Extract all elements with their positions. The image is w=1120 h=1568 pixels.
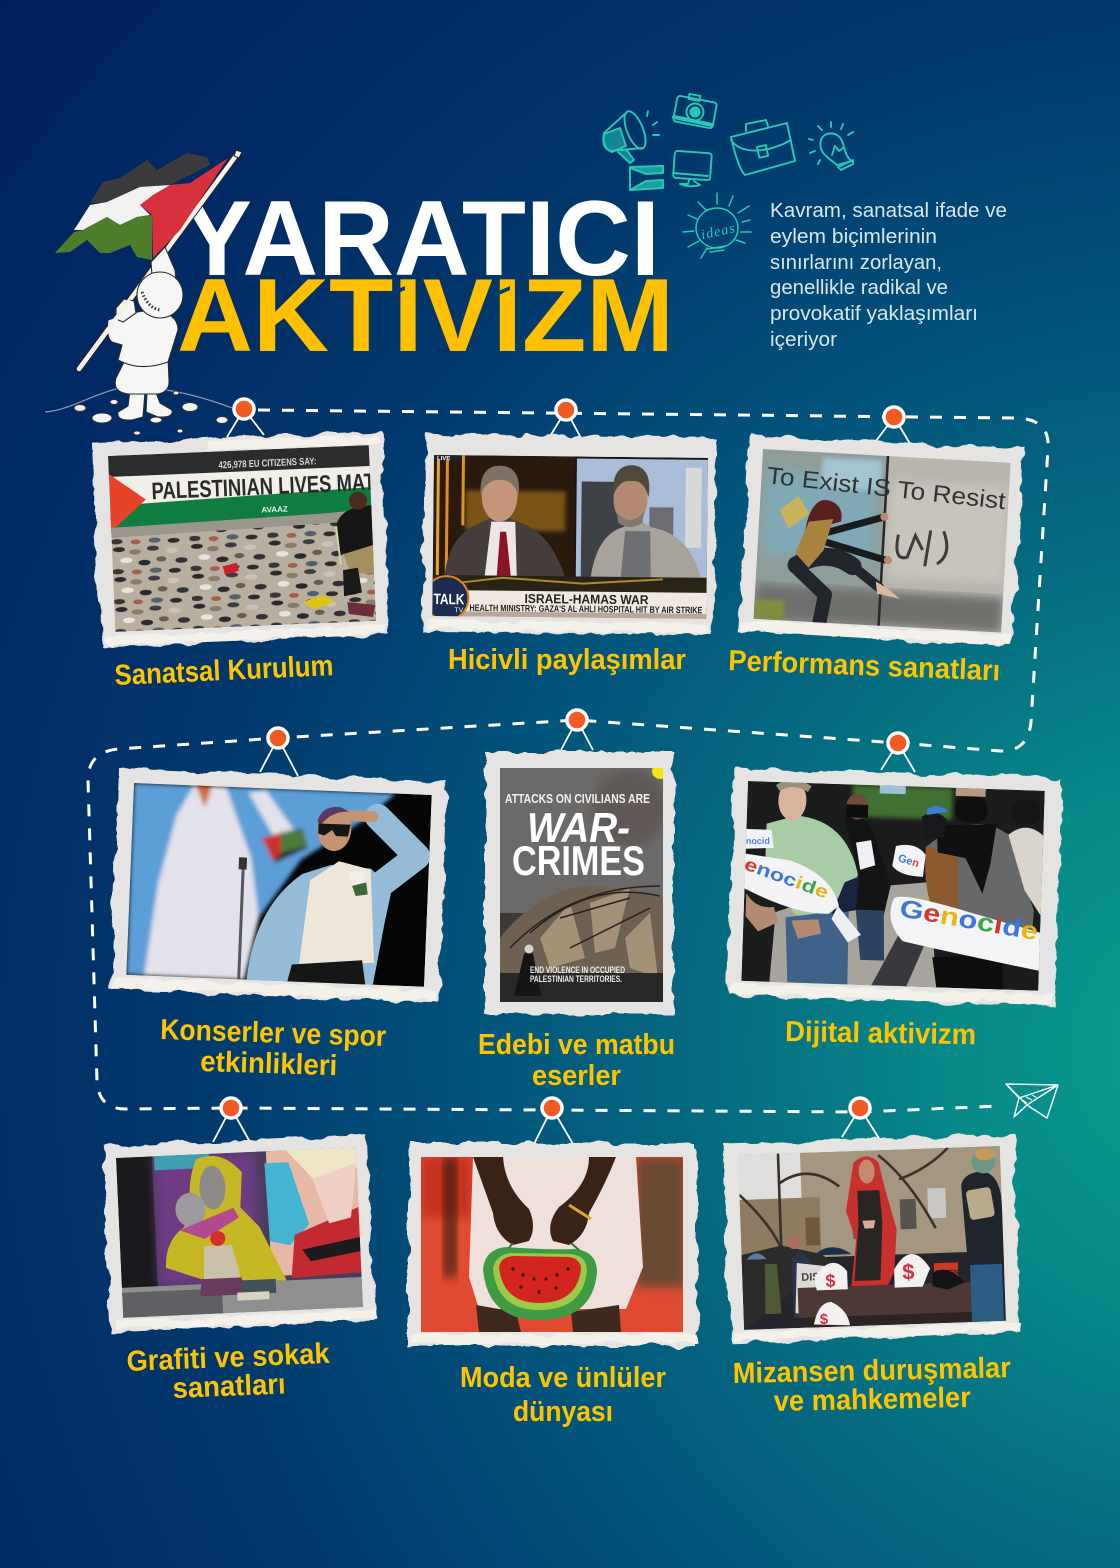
icon: ideas bulb [683,193,751,258]
caption: Grafiti ve sokak sanatları [126,1338,331,1405]
photo card 5: war crimes poster: CRIMES [512,837,645,884]
photo card 1: shoe installation: PALESTINIAN LIVES MATT [151,468,387,505]
intro paragraph: sınırlarını zorlayan, [770,252,942,274]
photo card 5: war crimes poster: WAR- [527,804,630,851]
caption: Edebi ve matbu eserler [478,1029,675,1092]
pin 2 [556,400,576,420]
dashed route line [88,410,1048,1112]
photo card 2: TV interview [423,434,715,635]
icon: briefcase [731,120,795,175]
pin 4 [268,728,288,748]
intro paragraph: provokatif yaklaşımları [770,303,978,325]
title: YARATICI: YARATICI [182,178,660,298]
photo card 7: graffiti mural [102,1135,376,1332]
caption: Grafiti ve sokak sanatları: sanatları [172,1368,286,1405]
photo card 6: digital activism protest: enocide [742,854,831,903]
pin 3 [884,407,904,427]
photo card 2: TV interview: TALK [433,591,465,608]
icon: hatched play block [630,166,663,190]
photo card 2: TV interview: HEALTH MINISTRY: GAZA'S AL AHLI HOSPITAL HIT BY AIR STRIKE [469,603,702,615]
caption: Moda ve ünlüler dünyası [460,1362,666,1428]
photo card 9: mock trial protest: $ [820,1311,829,1328]
pin 9 [850,1098,870,1118]
pin 6 [888,733,908,753]
illustration: child raising the Palestinian flag [45,150,242,435]
photo card 3: wall performance: To Exist IS To Resist [765,462,1007,515]
photo card 2: TV interview: TV [454,607,464,614]
photo card 5: war crimes poster: END VIOLENCE IN OCCUPIED [530,965,625,975]
caption: Dijital aktivizm: Dijital aktivizm [785,1016,976,1051]
caption: Edebi ve matbu eserler: eserler [532,1060,621,1092]
intro paragraph [770,200,1007,351]
photo card 9: mock trial protest: APAR [800,1290,825,1301]
caption: Konserler ve spor etkinlikleri [160,1014,387,1082]
title: AKTİVİZM: AKTİVİZM [177,258,674,374]
intro paragraph: genellikle radikal ve [770,277,948,299]
icons: teal doodles [603,94,853,258]
photo card 5: war crimes poster [485,752,674,1014]
photo card 6: digital activism protest: Gen [897,852,921,870]
pin 7 [221,1098,241,1118]
photo card 1: shoe installation: AVAAZ [261,505,288,515]
photo card 5: war crimes poster: ATTACKS ON CIVILIANS ARE [505,791,650,806]
photo card 2: TV interview: LIVE [437,456,450,462]
photo card 3: wall performance [739,434,1023,646]
icon: megaphone [603,108,659,163]
icon: light bulb [809,122,853,170]
caption: Konserler ve spor etkinlikleri: etkinlikleri [200,1046,338,1082]
photo card 9: mock trial protest [723,1134,1020,1343]
icon: paper plane [1006,1084,1058,1118]
icon: computer monitor [673,151,712,186]
photo card 6: digital activism protest [727,768,1062,1006]
photo card 1: shoe installation [91,431,393,648]
caption: Sanatsal Kurulum: Sanatsal Kurulum [114,650,334,692]
caption: Hicivli paylaşımlar: Hicivli paylaşımlar [448,644,686,676]
pin 8 [542,1098,562,1118]
photo card 8: watermelon bag [408,1143,697,1346]
caption: Konserler ve spor etkinlikleri: Konserler ve spor [160,1014,387,1053]
pin legs [213,409,915,1144]
pin 5 [567,710,587,730]
caption: Moda ve ünlüler dünyası: dünyası [513,1396,613,1428]
photo card 9: mock trial protest: $ [825,1271,836,1291]
photo card 9: mock trial protest: DEFEND [935,1269,964,1277]
photo card 6: digital activism protest: nocid [746,836,770,846]
photo card 4: concert performer [110,768,447,1002]
title: AKTİVİZM [180,279,667,351]
caption: Mizansen duruşmalar ve mahkemeler [732,1352,1011,1418]
photo card 6: digital activism protest: Genocide [898,894,1040,946]
photo card 2: TV interview: ISRAEL-HAMAS WAR [524,591,649,607]
caption: Performans sanatları: Performans sanatları [728,645,1001,687]
caption: Moda ve ünlüler dünyası: Moda ve ünlüler [460,1362,666,1394]
caption: Edebi ve matbu eserler: Edebi ve matbu [478,1029,675,1061]
pin 1 [234,399,254,419]
photo card 5: war crimes poster: PALESTINIAN TERRITORIES. [530,974,622,984]
caption: Mizansen duruşmalar ve mahkemeler: ve mahkemeler [773,1382,971,1418]
caption: Mizansen duruşmalar ve mahkemeler: Mizansen duruşmalar [732,1352,1011,1390]
icon: camera [673,94,717,129]
intro paragraph: eylem biçimlerinin [770,226,937,248]
icon: ideas bulb: ideas [700,221,737,243]
photo card 1: shoe installation: 426,978 EU CITIZENS SAY: [218,456,317,471]
intro paragraph: Kavram, sanatsal ifade ve [770,200,1007,222]
caption: Grafiti ve sokak sanatları: Grafiti ve sokak [126,1338,331,1378]
photo card 9: mock trial protest: DISA [801,1271,828,1284]
intro paragraph: içeriyor [770,329,837,351]
photo card 9: mock trial protest: $ [902,1259,915,1284]
